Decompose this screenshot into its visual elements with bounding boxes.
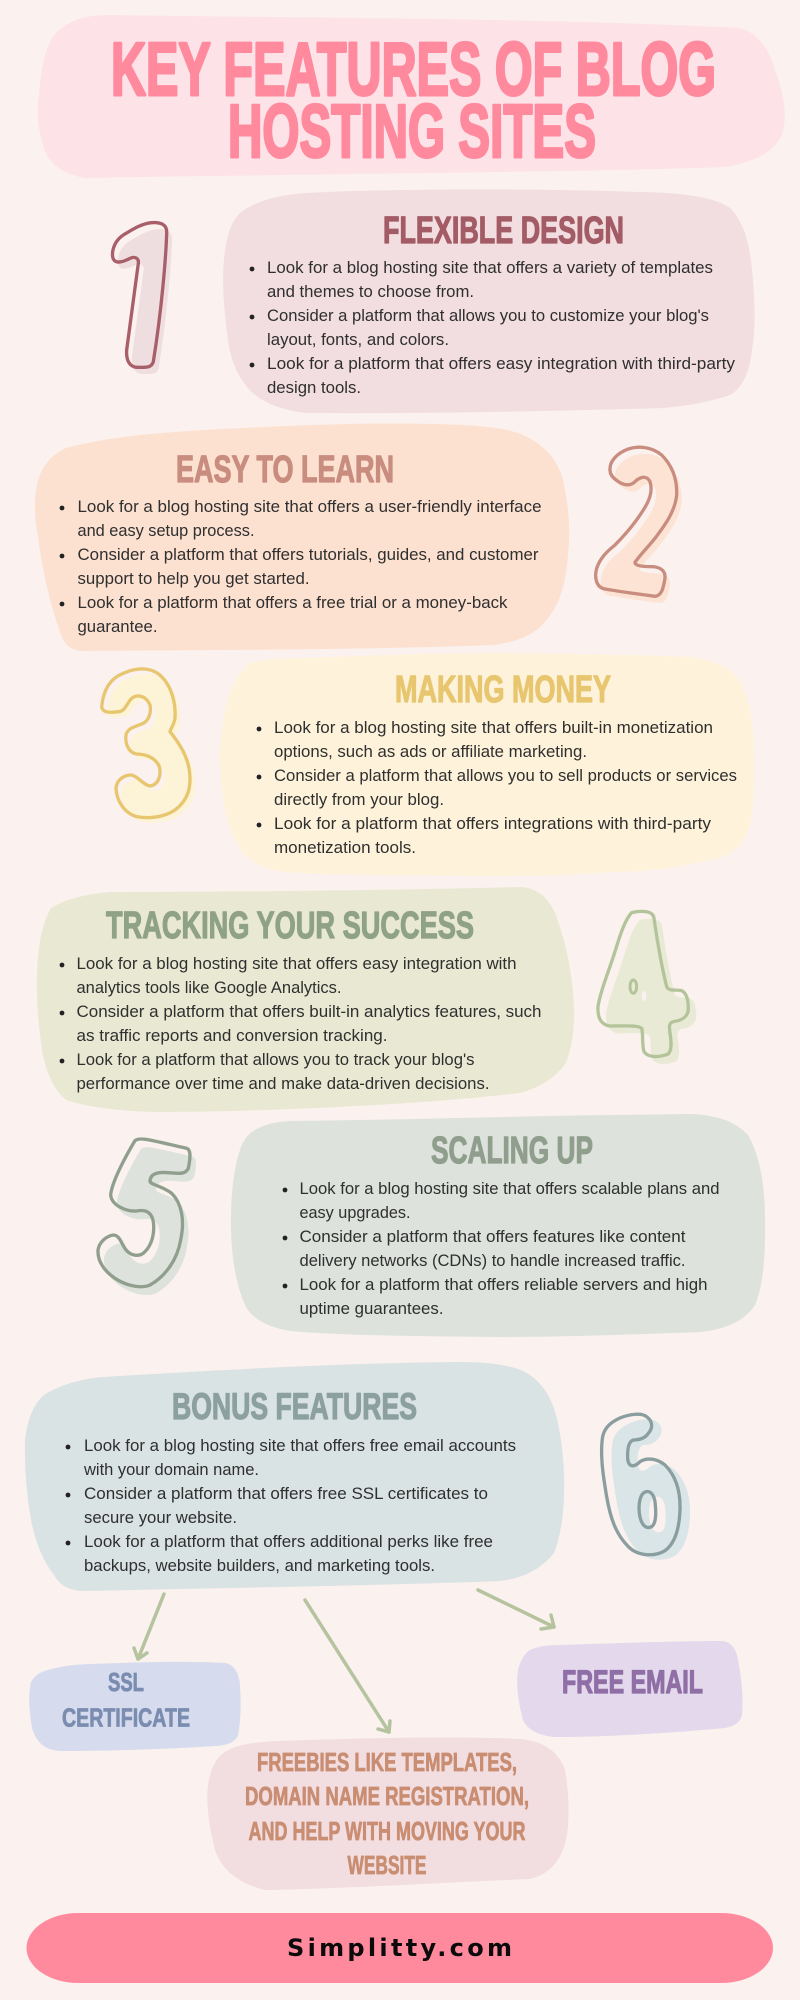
panel: bonus features: [25, 1362, 564, 1591]
number 3: [102, 669, 195, 823]
panel: bonus features: Consider a platform that offers free SSL certificates to: [84, 1484, 488, 1503]
callout: freebies: FREEBIES LIKE TEMPLATES,: [257, 1747, 517, 1777]
arrow: to free email: [478, 1590, 554, 1629]
number 4: [598, 911, 696, 1064]
panel: making money: monetization tools.: [274, 838, 416, 857]
panel: tracking your success: Consider a platform that offers built-in analytics features, such: [76, 1002, 542, 1021]
panel: scaling up: delivery networks (CDNs) to handle increased traffic.: [300, 1251, 686, 1270]
panel: easy to learn: guarantee.: [78, 617, 158, 636]
title banner: HOSTING SITES: [228, 89, 596, 173]
panel: scaling up: Look for a platform that offers reliable servers and high: [300, 1275, 708, 1294]
panel: making money: Look for a platform that offers integrations with third-party: [274, 814, 712, 833]
callout: SSL certificate: SSL: [108, 1667, 144, 1697]
panel: flexible design: FLEXIBLE DESIGN: [383, 210, 624, 252]
panel: making money: options, such as ads or affiliate marketing.: [274, 742, 587, 761]
callout: freebies: WEBSITE: [348, 1850, 426, 1880]
panel: easy to learn: [35, 423, 569, 651]
panel: scaling up: [231, 1114, 765, 1337]
callout: free email: FREE EMAIL: [562, 1664, 703, 1700]
panel: tracking your success: Look for a platform that allows you to track your blog's: [76, 1050, 474, 1069]
panel: scaling up: SCALING UP: [431, 1130, 593, 1172]
number 1: [112, 223, 172, 374]
panel: tracking your success: TRACKING YOUR SUCCESS: [106, 905, 474, 947]
panel: flexible design: layout, fonts, and colors.: [267, 330, 449, 349]
panel: making money: Look for a blog hosting site that offers built-in monetization: [274, 718, 713, 737]
callout: freebies: [207, 1738, 569, 1890]
panel: tracking your success: analytics tools like Google Analytics.: [76, 978, 342, 997]
panel: scaling up: easy upgrades.: [300, 1203, 410, 1222]
footer: Simplitty.com: [287, 1934, 512, 1962]
panel: scaling up: Consider a platform that offers features like content: [300, 1227, 686, 1246]
panel: making money: MAKING MONEY: [395, 669, 611, 711]
panel: flexible design: design tools.: [267, 378, 361, 397]
panel: easy to learn: support to help you get started.: [78, 569, 310, 588]
panel: bonus features: Look for a platform that offers additional perks like free: [84, 1532, 493, 1551]
panel: bonus features: Look for a blog hosting site that offers free email accounts: [84, 1436, 516, 1455]
panel: easy to learn: EASY TO LEARN: [176, 449, 394, 491]
panel: tracking your success: Look for a blog hosting site that offers easy integration with: [76, 954, 516, 973]
panel: easy to learn: Consider a platform that offers tutorials, guides, and customer: [78, 545, 539, 564]
arrow: to freebies: [305, 1600, 390, 1732]
panel: tracking your success: [37, 887, 574, 1112]
footer: [26, 1913, 773, 1983]
panel: flexible design: Look for a platform that offers easy integration with third-party: [267, 354, 735, 373]
callout: SSL certificate: CERTIFICATE: [62, 1702, 190, 1732]
panel: scaling up: Look for a blog hosting site that offers scalable plans and: [300, 1179, 720, 1198]
number 5: [98, 1139, 196, 1295]
panel: tracking your success: as traffic reports and conversion tracking.: [76, 1026, 388, 1045]
callout: freebies: DOMAIN NAME REGISTRATION,: [245, 1781, 529, 1811]
panel: flexible design: Consider a platform that allows you to customize your blog's: [267, 306, 709, 325]
panel: making money: Consider a platform that allows you to sell products or services: [274, 766, 737, 785]
panel: flexible design: Look for a blog hosting site that offers a variety of templates: [267, 258, 713, 277]
panel: bonus features: BONUS FEATURES: [172, 1386, 417, 1427]
panel: bonus features: secure your website.: [84, 1508, 237, 1527]
panel: easy to learn: and easy setup process.: [78, 521, 254, 540]
arrow: to SSL certificate: [134, 1594, 164, 1659]
panel: scaling up: uptime guarantees.: [300, 1299, 444, 1318]
number 6: [602, 1414, 690, 1560]
panel: bonus features: backups, website builders, and marketing tools.: [84, 1556, 435, 1575]
callout: free email: [517, 1641, 742, 1737]
panel: bonus features: with your domain name.: [83, 1460, 259, 1479]
panel: making money: [220, 653, 754, 876]
panel: tracking your success: performance over time and make data-driven decisions.: [76, 1074, 490, 1093]
number 2: [596, 447, 682, 603]
title banner: [38, 15, 785, 178]
panel: easy to learn: Look for a platform that offers a free trial or a money-back: [78, 593, 508, 612]
callout: SSL certificate: [29, 1662, 241, 1751]
panel: flexible design: and themes to choose from.: [267, 282, 474, 301]
panel: easy to learn: Look for a blog hosting site that offers a user-friendly interface: [78, 497, 542, 516]
callout: freebies: AND HELP WITH MOVING YOUR: [248, 1816, 526, 1846]
panel: flexible design: [223, 189, 755, 413]
panel: making money: directly from your blog.: [274, 790, 444, 809]
